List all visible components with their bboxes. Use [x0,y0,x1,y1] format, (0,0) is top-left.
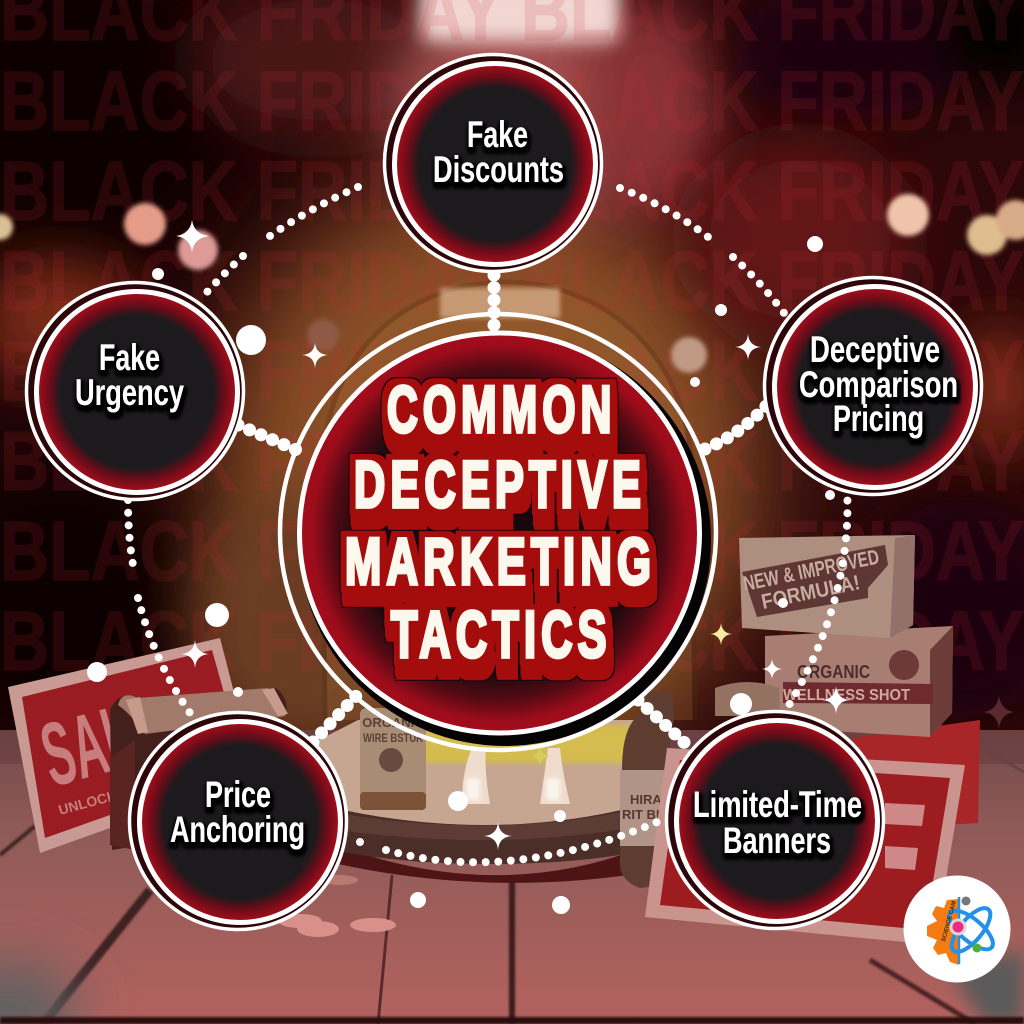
connector beads: to Fake Discounts [488,275,500,328]
product: jar and HIRA bottle: RIT BU [622,807,665,822]
satellite: Fake Urgency: Fake [99,337,160,378]
product: organic bottle under dome: ORGANIC [362,715,424,730]
glass dome and tray [285,282,695,883]
logo: orange gear half [927,899,959,965]
satellite: Limited-Time Banners: Banners [723,820,831,861]
title: Common Deceptive Marketing Tactics [345,373,656,671]
connector: dotted orbit right lower [786,488,847,710]
satellite: Price Anchoring: Anchoring [170,809,305,850]
product: organic bottle under dome: WIRE BSTUR [363,731,423,745]
product: stacked boxes: WELLNESS SHOT [783,687,910,704]
satellite: Deceptive Comparison Pricing [764,278,982,494]
logo: small globe [972,944,982,952]
logo: wordmark: SCIENCE CAM [941,900,958,943]
satellite: Fake Discounts: Discounts [433,149,564,190]
connector: dotted orbit left lower [138,598,195,720]
connector beads: to Price Anchoring [313,694,358,742]
connector: dotted orbit left upper [128,500,134,570]
logo badge [904,876,1010,982]
logo: blue atom half [943,897,999,964]
satellite: Price Anchoring [130,712,346,930]
title: Common Deceptive Marketing Tactics: DECEPTIVE [354,448,646,521]
logo: grey ball [962,896,970,906]
satellite: Price Anchoring: Price [205,774,271,815]
connector beads: to Deceptive Comparison Pricing [705,404,768,449]
title: Common Deceptive Marketing Tactics: COMMON [387,373,617,446]
satellite: Fake Discounts [384,54,602,272]
satellite: Limited-Time Banners [666,712,884,928]
title: Common Deceptive Marketing Tactics: MARKETING [345,524,656,598]
connector beads: to Limited-Time Banners [638,700,688,746]
title: Common Deceptive Marketing Tactics: TACTICS [391,598,612,671]
satellite: Deceptive Comparison Pricing: Comparison [799,364,958,405]
product: SALE sign left: SALE [31,679,173,806]
connector: dotted orbit top-left [267,187,358,238]
satellite: Fake Discounts: Fake [467,114,528,155]
watermark: BLACK FRIDAY repeated rows [0,0,1024,688]
sparkles [176,220,1014,850]
connector: dotted orbit top-left continuation [199,256,243,301]
connector: dotted orbit top-right [620,188,712,240]
product: SALE sign left [8,638,236,853]
product: SALE sign right [645,748,965,945]
product: stacked boxes: ORGANIC [797,662,870,682]
logo: pink brain centre [951,920,965,934]
main hub circle [280,314,716,750]
satellite: Deceptive Comparison Pricing: Deceptive [810,329,940,370]
satellite: Deceptive Comparison Pricing: Pricing [833,398,924,439]
product: stacked boxes [739,535,980,830]
product: jar and HIRA bottle: HIRA [630,792,662,807]
connector: dotted orbit bottom [360,820,662,862]
coins on the table [278,875,396,937]
product: treasure chest [110,688,288,850]
satellite: Fake Urgency [26,282,244,500]
connector beads: to Fake Urgency [238,425,299,451]
satellite: Limited-Time Banners: Limited-Time [693,784,862,825]
bokeh lights [0,194,1024,373]
product: stacked boxes: NEW & IMPROVED [741,546,881,596]
satellite: Fake Urgency: Urgency [75,372,184,413]
product: organic bottle under dome [360,708,426,810]
product: stacked boxes: FORMULA! [759,571,862,614]
product: SALE sign left: UNLOCK [57,787,119,818]
loose decorative dots [87,236,835,914]
connector: dotted orbit right upper [733,257,787,317]
table surface [0,730,1024,1024]
product: jar and HIRA bottle [620,682,780,888]
